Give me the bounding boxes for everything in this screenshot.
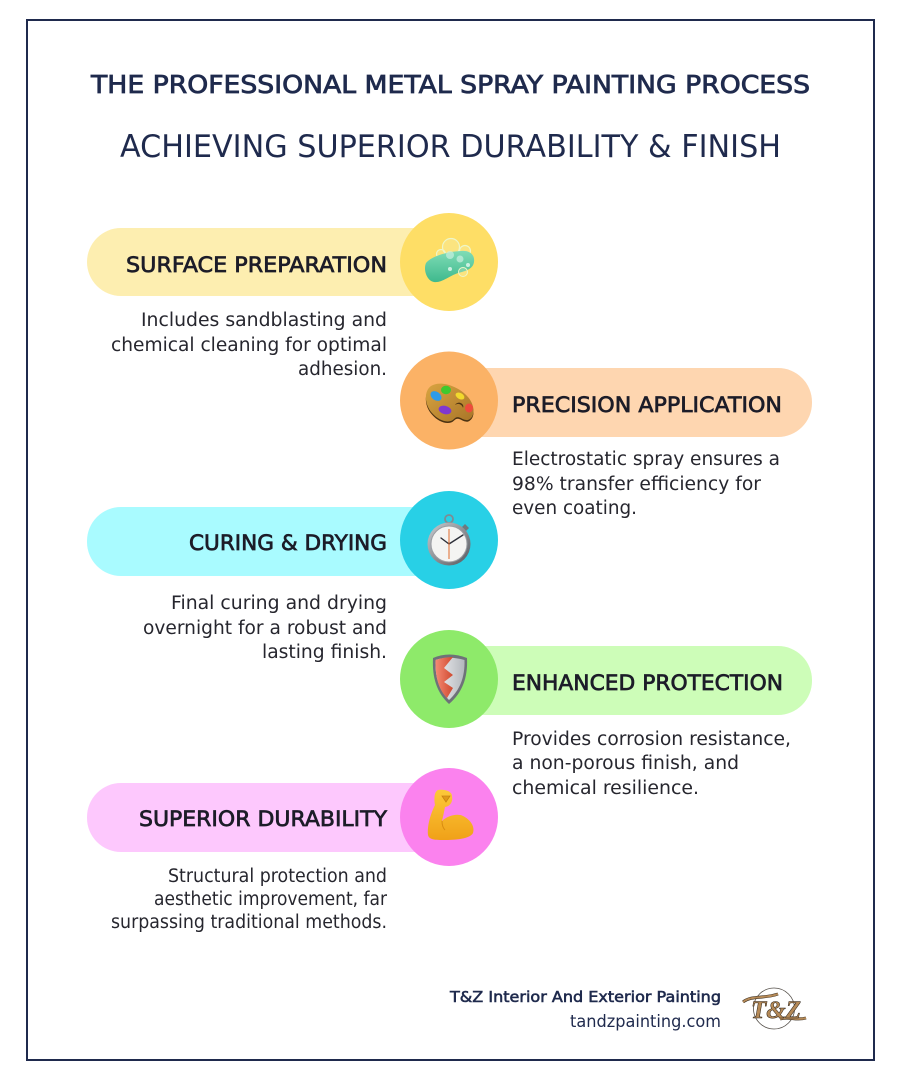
description: surpassing traditional methods. — [111, 912, 387, 933]
title: THE PROFESSIONAL METAL SPRAY PAINTING PROCESS — [90, 70, 810, 99]
heading: surface preparation: SURFACE PREPARATION — [126, 253, 387, 277]
heading: curing and drying: CURING & DRYING — [189, 531, 387, 555]
heading: precision application: PRECISION APPLICATION — [512, 393, 782, 417]
description: chemical resilience. — [512, 778, 699, 799]
logo: T&Z: T&Z — [751, 997, 801, 1024]
description: Includes sandblasting and — [141, 310, 387, 331]
icon: shield — [400, 630, 498, 728]
heading pill — [87, 783, 467, 852]
description: adhesion. — [298, 359, 387, 380]
description — [111, 866, 387, 933]
heading pill — [87, 507, 467, 576]
panel: curing and drying — [87, 491, 498, 663]
panel: precision application — [400, 352, 812, 519]
description: aesthetic improvement, far — [154, 889, 387, 910]
panel: superior durability — [87, 768, 498, 933]
description — [512, 449, 780, 519]
subtitle: ACHIEVING SUPERIOR DURABILITY & FINISH — [120, 129, 781, 165]
logo: T&Z — [743, 988, 806, 1029]
heading: superior durability: SUPERIOR DURABILITY — [139, 807, 387, 831]
footer: website: tandzpainting.com — [570, 1012, 721, 1031]
description — [512, 729, 791, 799]
icon: paint palette — [400, 352, 498, 450]
footer: company name: T&Z Interior And Exterior Painting — [449, 988, 721, 1006]
description: chemical cleaning for optimal — [111, 335, 387, 356]
description — [111, 310, 387, 380]
icon: soap bar — [400, 213, 498, 311]
description: Electrostatic spray ensures a — [512, 449, 780, 470]
heading: enhanced protection: ENHANCED PROTECTION — [512, 671, 783, 695]
icon: flexed biceps — [400, 768, 498, 866]
panel: enhanced protection — [400, 630, 812, 799]
description — [143, 593, 387, 663]
description: a non-porous finish, and — [512, 753, 739, 774]
description: lasting finish. — [262, 642, 387, 663]
description: overnight for a robust and — [143, 618, 387, 639]
panel: surface preparation — [87, 213, 498, 380]
description: Provides corrosion resistance, — [512, 729, 791, 750]
description: 98% transfer efficiency for — [512, 474, 761, 495]
heading pill — [87, 228, 467, 296]
heading pill — [432, 368, 812, 437]
description: Structural protection and — [168, 866, 387, 887]
description: even coating. — [512, 498, 637, 519]
description: Final curing and drying — [171, 593, 387, 614]
icon: stopwatch — [400, 491, 498, 589]
heading pill — [432, 646, 812, 715]
